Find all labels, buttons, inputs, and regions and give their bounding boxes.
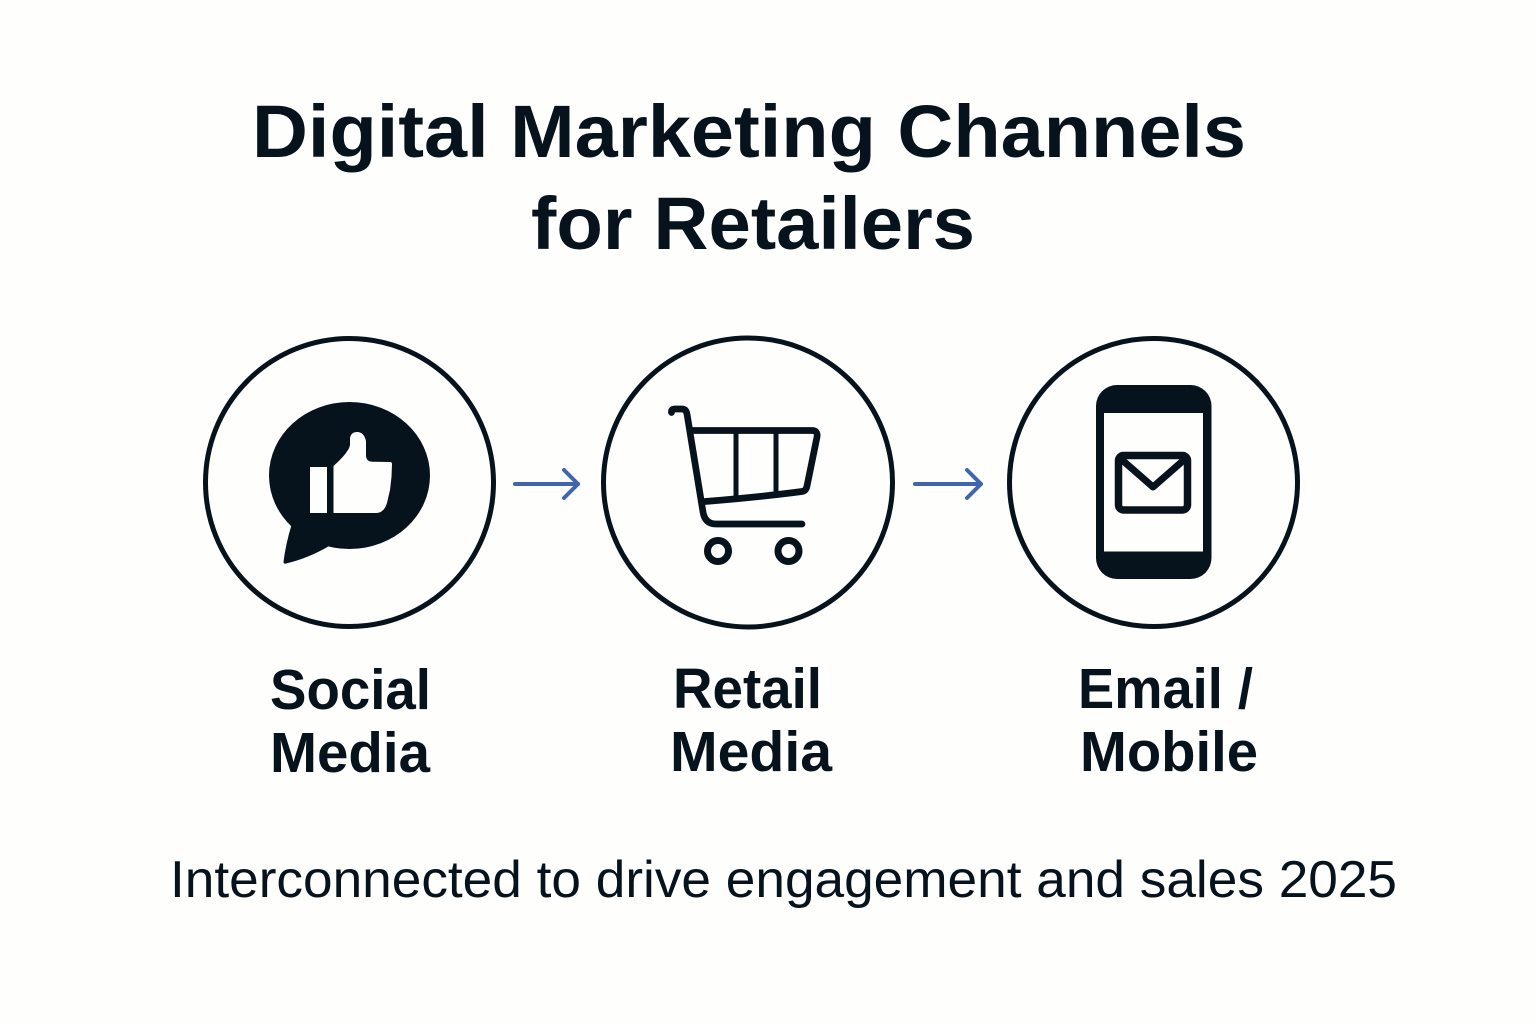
icon: shopping cart xyxy=(671,409,817,562)
label: email and mobile xyxy=(1078,657,1258,784)
title xyxy=(252,90,1246,265)
label: retail media xyxy=(670,657,833,784)
label: retail media: Media xyxy=(670,720,833,784)
label: social media: Media xyxy=(270,721,431,785)
label: email and mobile: Email / xyxy=(1078,657,1253,721)
subtitle: Interconnected to drive engagement and sales 2025 xyxy=(170,851,1397,909)
arrow: social to retail xyxy=(515,470,578,498)
label: social media xyxy=(270,658,431,785)
title: Digital Marketing Channels xyxy=(252,90,1246,173)
icon: speech bubble with thumbs up xyxy=(269,402,430,563)
circle: retail media xyxy=(604,338,892,627)
label: email and mobile: Mobile xyxy=(1080,720,1258,784)
arrow: retail to email xyxy=(915,470,981,498)
label: retail media: Retail xyxy=(673,657,822,721)
channel: retail media xyxy=(604,338,892,627)
icon: phone with envelope xyxy=(1096,385,1212,579)
channel: email and mobile xyxy=(1010,338,1298,626)
circle: social media xyxy=(206,338,494,626)
title: for Retailers xyxy=(531,182,975,265)
label: social media: Social xyxy=(270,658,431,722)
channel: social media xyxy=(206,338,494,626)
circle: email and mobile xyxy=(1010,338,1298,626)
